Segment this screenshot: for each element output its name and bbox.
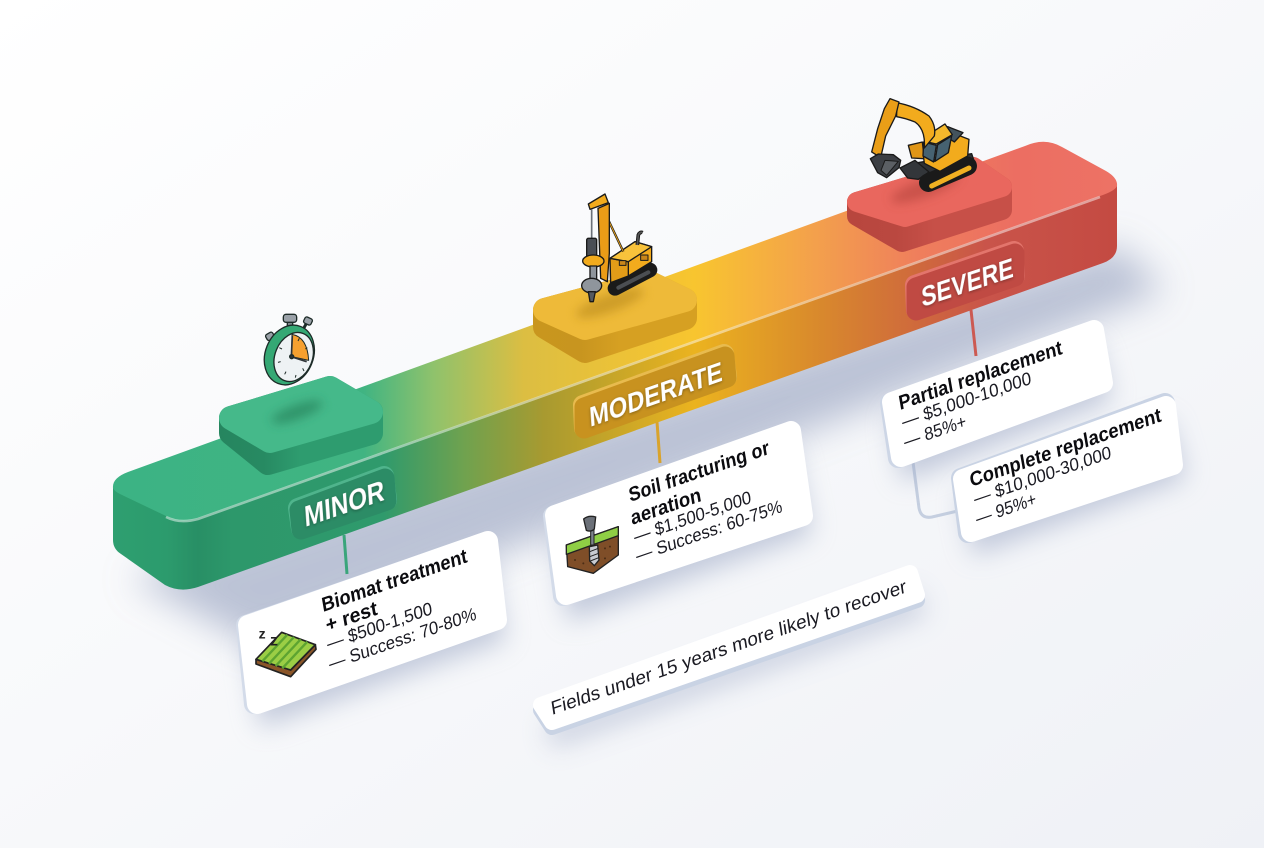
card: soil fracturing: aeration (629, 484, 703, 530)
pedestal: severe (857, 167, 1002, 242)
card: complete replacement: Complete replacement (968, 404, 1163, 492)
badge: moderate: MODERATE (588, 356, 723, 434)
severity bar (113, 142, 1117, 590)
icon: stopwatch (256, 314, 323, 392)
connector: partial to complete (913, 462, 962, 517)
card: partial replacement: — 85%+ (902, 411, 968, 452)
card: soil fracturing: — Success: 60-75% (634, 496, 784, 566)
icon: drill rig (582, 194, 652, 302)
card: complete replacement: — 95%+ (974, 489, 1038, 529)
card: biomat treatment: — Success: 70-80% (327, 604, 478, 674)
icon: resting turf: z (259, 626, 266, 642)
connector: moderate (657, 422, 660, 463)
card: soil fracturing (553, 431, 812, 622)
connector: severe (971, 310, 976, 356)
connector: minor (344, 535, 347, 574)
card: partial replacement: Partial replacement (897, 337, 1064, 415)
badge: severe: SEVERE (920, 252, 1014, 314)
card: biomat treatment: Biomat treatment (320, 545, 469, 617)
icon: resting turf (256, 626, 316, 677)
pedestal: moderate (545, 282, 685, 351)
card: soil fracturing: — $1,500-5,000 (632, 487, 753, 547)
badge: minor: MINOR (303, 475, 385, 534)
card: complete replacement: — $10,000-30,000 (972, 442, 1113, 509)
card: partial replacement (890, 330, 1112, 482)
bar cast shadow (130, 245, 1165, 648)
card: soil fracturing: Soil fracturing or (627, 437, 771, 507)
card: biomat treatment: — $500-1,500 (325, 598, 434, 654)
pedestal: minor (231, 388, 371, 463)
icon: excavator (870, 99, 975, 186)
icon: resting turf: z (270, 632, 278, 649)
icon: soil drill (566, 516, 618, 573)
note: field age: Fields under 15 years more likely to recover (550, 576, 908, 720)
card: biomat treatment: + rest (324, 598, 379, 637)
card: partial replacement: — $5,000-10,000 (900, 368, 1033, 432)
card: biomat treatment (246, 541, 506, 728)
card: complete replacement (961, 403, 1186, 556)
